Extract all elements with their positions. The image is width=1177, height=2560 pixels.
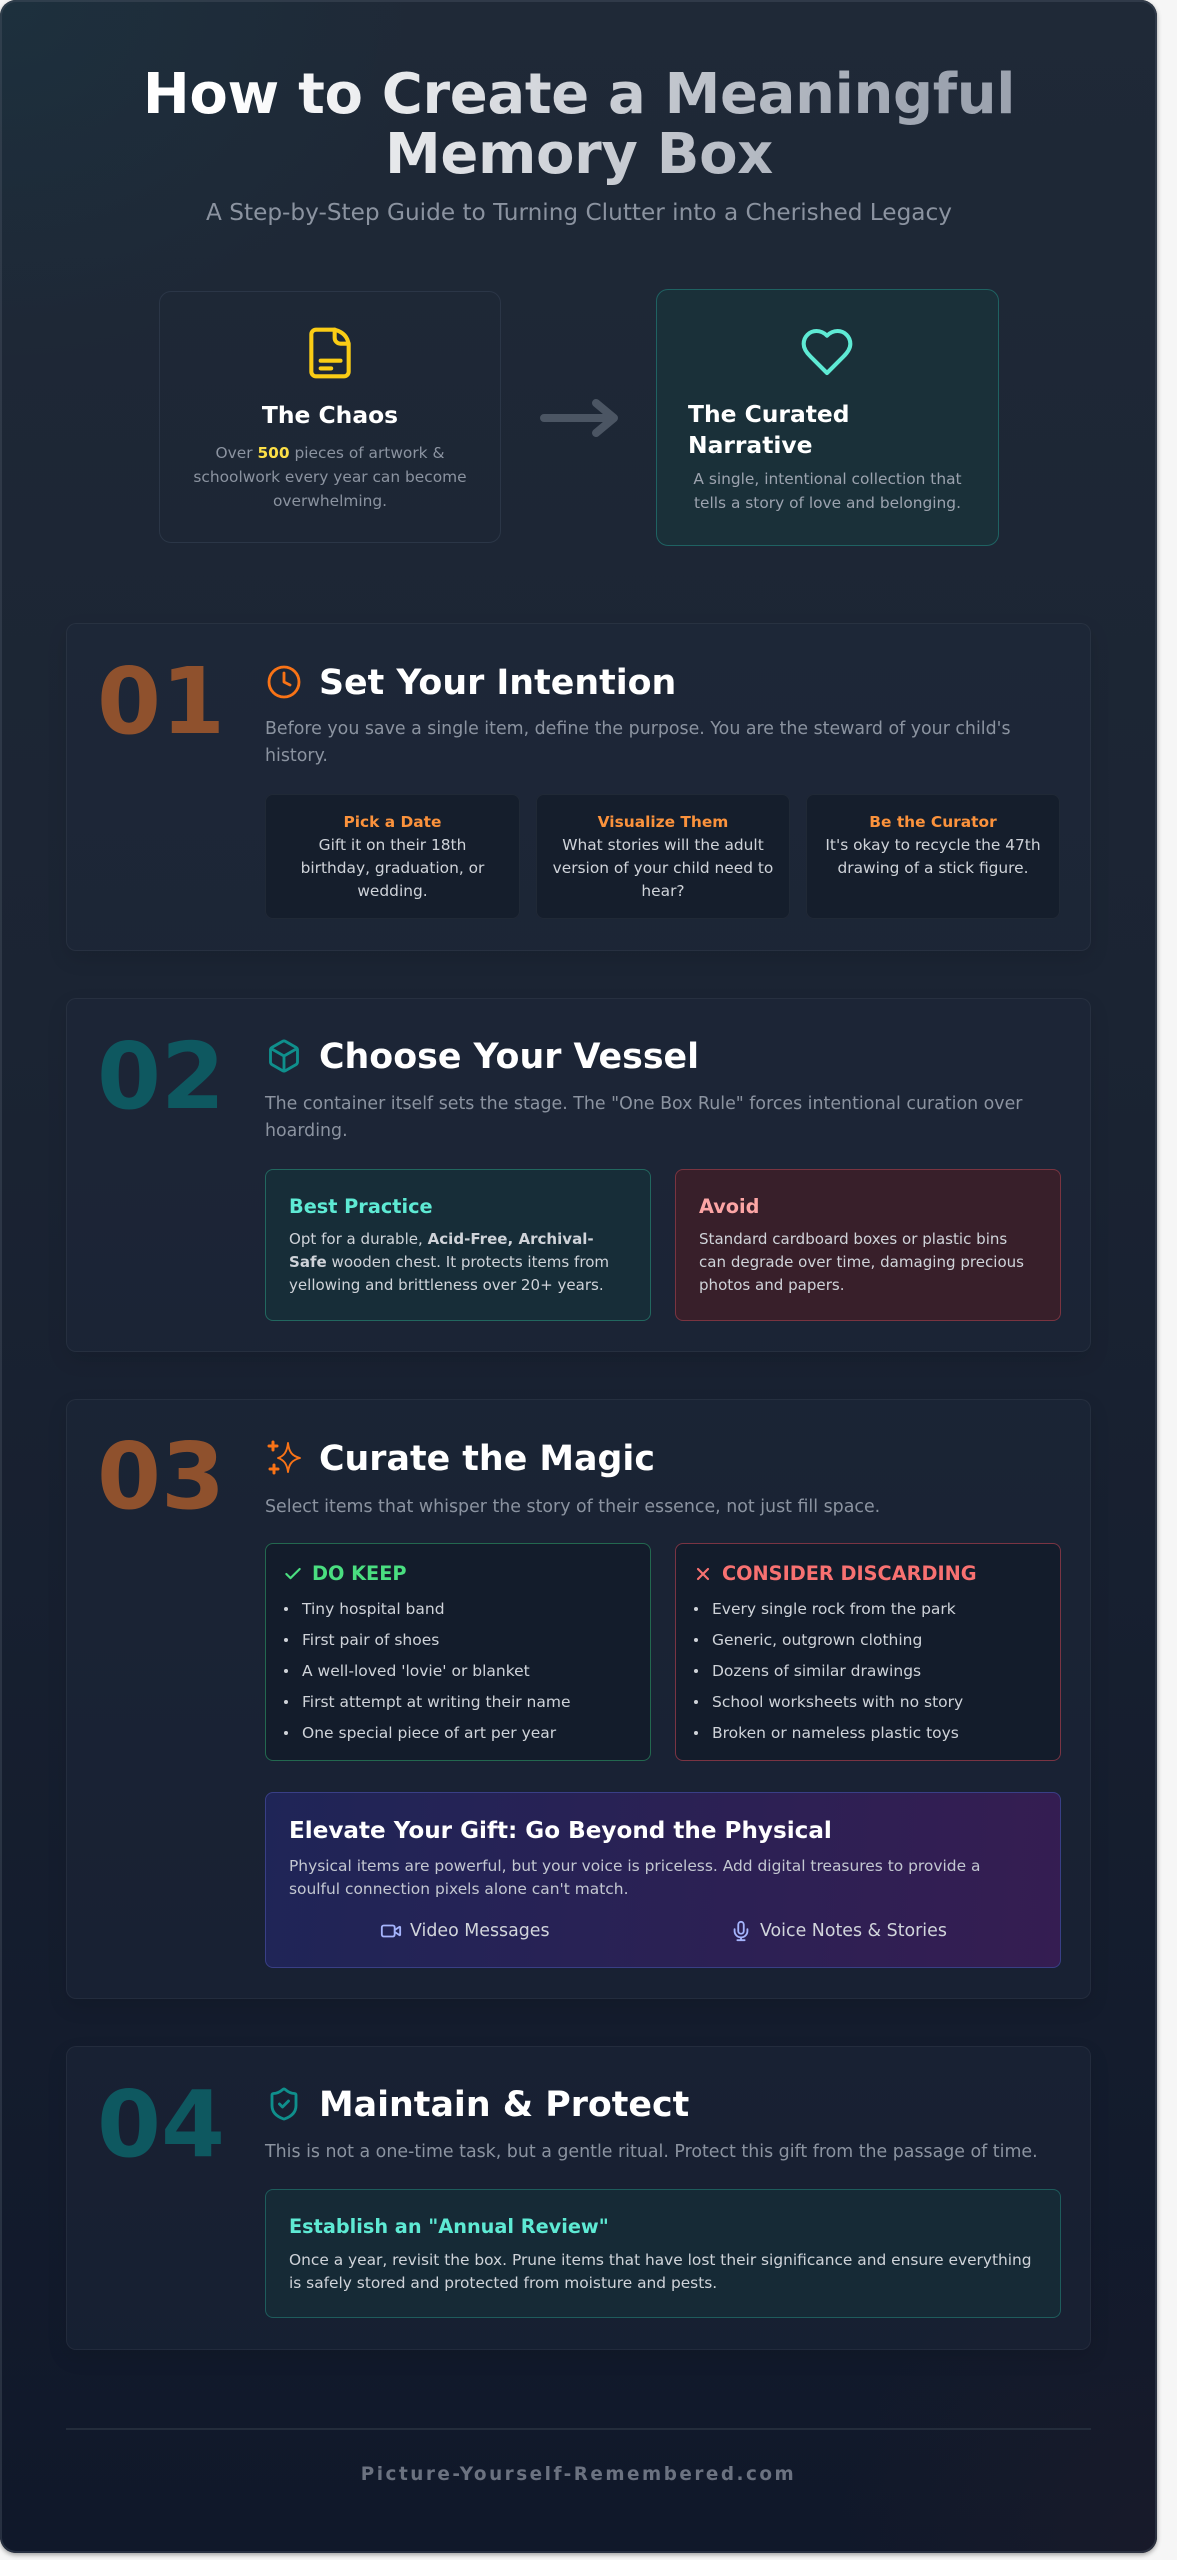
callout text: Physical items are powerful, but your voice is priceless. Add digital treasures to provide a (289, 1857, 980, 1875)
card: be the curator: Be the Curator (869, 813, 997, 831)
arrow (540, 399, 618, 437)
text: curated description: tells a story of love and belonging. (694, 494, 961, 512)
icon: shield check (270, 2088, 298, 2120)
card: best practice: Best Practice (289, 1195, 433, 1218)
heading: consider discarding: CONSIDER DISCARDING (722, 1562, 977, 1585)
card: consider discarding: School worksheets with no story (712, 1693, 963, 1711)
text: chaos description: schoolwork every year can become (193, 468, 467, 486)
card: consider discarding: Generic, outgrown clothing (712, 1631, 922, 1649)
text: curated description (693, 470, 962, 512)
card: best practice (265, 1169, 651, 1321)
description: Select items that whisper the story of their essence, not just fill space. (265, 1497, 880, 1517)
card: annual review: is safely stored and protected from moisture and pests. (289, 2274, 717, 2292)
title: Memory Box (385, 122, 773, 187)
heading: do keep: DO KEEP (312, 1562, 407, 1585)
card: visualize them: version of your child need to (553, 859, 773, 877)
card: pick a date (265, 794, 520, 919)
card: do keep: One special piece of art per year (302, 1724, 556, 1742)
description: This is not a one-time task, but a gentle ritual. Protect this gift from the passage of time. (265, 2142, 1038, 2162)
card: visualize them (536, 794, 790, 919)
card: avoid (675, 1169, 1061, 1321)
footer (66, 2428, 1091, 2490)
callout text (289, 1857, 980, 1898)
icon: check (285, 1568, 301, 1580)
callout: elevate your gift (265, 1792, 1061, 1968)
heading: Set Your Intention (319, 663, 676, 703)
icon: box (269, 1040, 299, 1072)
card: do keep: A well-loved 'lovie' or blanket (302, 1662, 530, 1680)
subtitle: A Step-by-Step Guide to Turning Clutter into a Cherished Legacy (206, 199, 952, 226)
card: do keep: Tiny hospital band (302, 1600, 445, 1618)
card: pick a date: wedding. (357, 882, 428, 900)
footer text: Picture-Yourself-Remembered.com (361, 2464, 796, 2485)
card: pick a date: Gift it on their 18th (319, 836, 466, 854)
heading: Curate the Magic (319, 1439, 655, 1479)
card: avoid: Avoid (699, 1195, 759, 1218)
card: do keep: First pair of shoes (302, 1631, 439, 1649)
card: best practice: Safe wooden chest. It protects items from (289, 1253, 609, 1271)
card: avoid: photos and papers. (699, 1276, 845, 1294)
icon: microphone (734, 1920, 748, 1942)
panel: step 2 (66, 998, 1091, 1352)
callout text: soulful connection pixels alone can't match. (289, 1880, 628, 1898)
card: visualize them: Visualize Them (598, 813, 728, 831)
description: history. (265, 746, 328, 766)
heading: the curated narrative: Narrative (688, 431, 813, 459)
title: How to Create a Meaningful (143, 62, 1015, 127)
card: be the curator (806, 794, 1060, 919)
card: visualize them: What stories will the adult (562, 836, 764, 854)
heading: Maintain & Protect (319, 2085, 689, 2125)
heading: the curated narrative (688, 400, 850, 459)
card: be the curator: It's okay to recycle the 47th (825, 836, 1041, 854)
icon: clock (268, 666, 300, 698)
icon: heart (802, 329, 852, 376)
title (79, 65, 1079, 185)
icon: document (309, 328, 351, 378)
card: best practice: Opt for a durable, Acid-Free, Archival- (289, 1230, 594, 1248)
card: do keep (265, 1543, 651, 1761)
description: hoarding. (265, 1121, 348, 1141)
icon: sparkles (268, 1440, 301, 1474)
text: curated description: A single, intentional collection that (693, 470, 962, 488)
card: consider discarding: Every single rock from the park (712, 1600, 956, 1618)
card: consider discarding (675, 1543, 1061, 1761)
panel: step 1 (66, 623, 1091, 951)
panel: step 4 (66, 2046, 1091, 2350)
card: avoid: Standard cardboard boxes or plastic bins (699, 1230, 1007, 1248)
panel: step 3 (66, 1399, 1091, 1999)
label: video messages: Video Messages (410, 1921, 550, 1941)
icon: video (380, 1924, 402, 1938)
card: annual review (265, 2189, 1061, 2318)
card: consider discarding: Broken or nameless plastic toys (712, 1724, 959, 1742)
card: pick a date: birthday, graduation, or (301, 859, 484, 877)
text: chaos description: Over 500 pieces of artwork & (216, 444, 444, 462)
card: annual review: Once a year, revisit the box. Prune items that have lost their significance and ensure everything (289, 2251, 1032, 2269)
card: consider discarding: Dozens of similar drawings (712, 1662, 921, 1680)
card: be the curator: drawing of a stick figure. (837, 859, 1029, 877)
icon: x (696, 1568, 710, 1580)
label: voice notes: Voice Notes & Stories (760, 1921, 947, 1941)
card: visualize them: hear? (641, 882, 685, 900)
card: do keep: First attempt at writing their name (302, 1693, 571, 1711)
heading: the chaos: The Chaos (262, 401, 398, 429)
card: pick a date: Pick a Date (344, 813, 441, 831)
heading: Choose Your Vessel (319, 1037, 699, 1077)
callout heading: Elevate Your Gift: Go Beyond the Physical (289, 1818, 832, 1844)
text: chaos description (193, 444, 467, 510)
panel: the chaos (159, 291, 501, 543)
panel: the curated narrative (656, 289, 999, 546)
text: chaos description: overwhelming. (273, 492, 387, 510)
number 02: 02 (97, 1023, 225, 1130)
number 01: 01 (97, 648, 225, 755)
number 04: 04 (97, 2071, 225, 2178)
card: best practice: yellowing and brittleness over 20+ years. (289, 1276, 604, 1294)
description (264, 1094, 1022, 1141)
card: avoid: can degrade over time, damaging precious (699, 1253, 1024, 1271)
heading: the curated narrative: The Curated (688, 400, 850, 428)
number 03: 03 (97, 1423, 225, 1530)
card: annual review: Establish an "Annual Review" (289, 2215, 609, 2238)
description: The container itself sets the stage. The "One Box Rule" forces intentional curation over (265, 1094, 1022, 1114)
description (265, 719, 1011, 766)
description: Before you save a single item, define the purpose. You are the steward of your child's (265, 719, 1011, 739)
